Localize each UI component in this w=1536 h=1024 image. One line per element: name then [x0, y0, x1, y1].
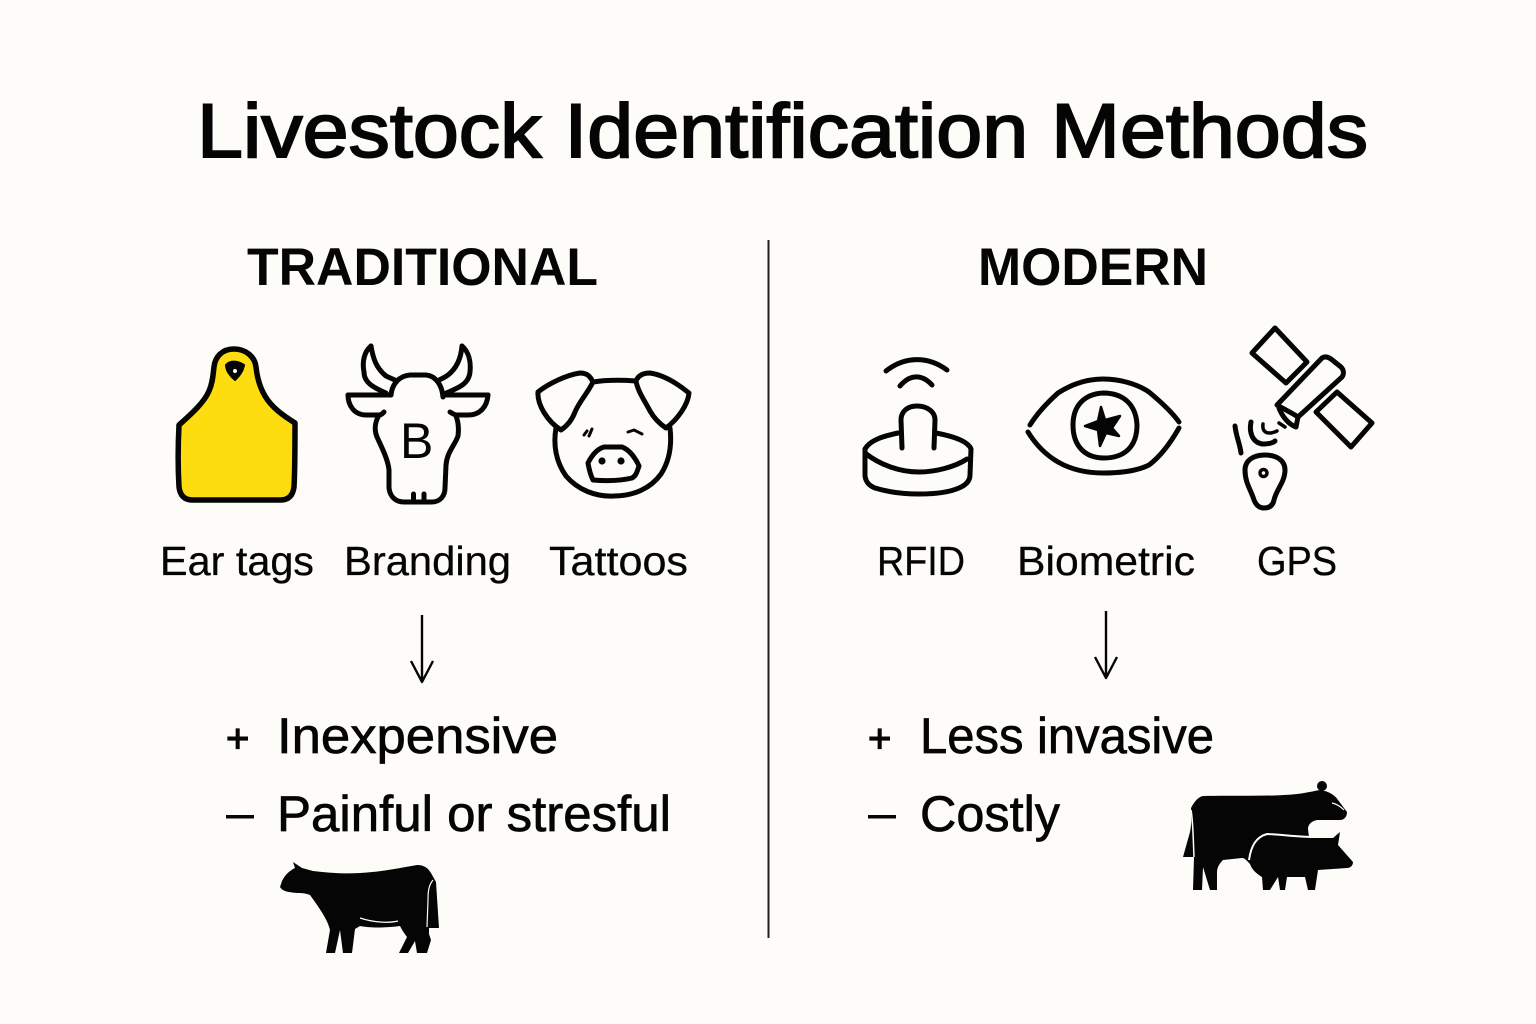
panel: traditional — [160, 238, 689, 953]
con text: painful or stressful: Painful or stresful — [277, 786, 671, 842]
icon: gps satellite and tag — [1235, 328, 1372, 508]
arrow: traditional down — [411, 615, 433, 682]
icon: yellow ear tag — [178, 349, 295, 500]
pro text: inexpensive: Inexpensive — [277, 708, 558, 764]
con text: costly: Costly — [920, 786, 1060, 842]
pro text: less invasive: Less invasive — [920, 708, 1214, 764]
icon: cow silhouette — [280, 862, 439, 953]
pro marker: + — [868, 717, 891, 761]
icon: cow and pig silhouette — [1183, 781, 1353, 890]
heading: traditional: TRADITIONAL — [247, 238, 598, 297]
arrow: modern down — [1095, 611, 1117, 678]
label: biometric: Biometric — [1017, 538, 1195, 584]
con marker — [226, 815, 254, 818]
icon: branded cow head — [348, 346, 488, 502]
vertical divider between panels — [768, 240, 770, 938]
icon: pig face — [538, 373, 689, 496]
brand letter on the cow: B — [400, 413, 433, 469]
label: rfid: RFID — [877, 538, 965, 584]
icon: biometric eye — [1028, 379, 1179, 473]
label: gps: GPS — [1257, 538, 1337, 584]
con marker — [868, 815, 896, 818]
pro marker: + — [226, 717, 249, 761]
title: Livestock Identification Methods — [197, 89, 1368, 174]
label: ear tags: Ear tags — [160, 538, 314, 584]
heading: modern: MODERN — [978, 238, 1208, 297]
panel: modern — [865, 238, 1372, 890]
label: tattoos: Tattoos — [549, 538, 688, 584]
label: branding: Branding — [344, 538, 511, 584]
icon: rfid chip with signal — [865, 360, 971, 494]
